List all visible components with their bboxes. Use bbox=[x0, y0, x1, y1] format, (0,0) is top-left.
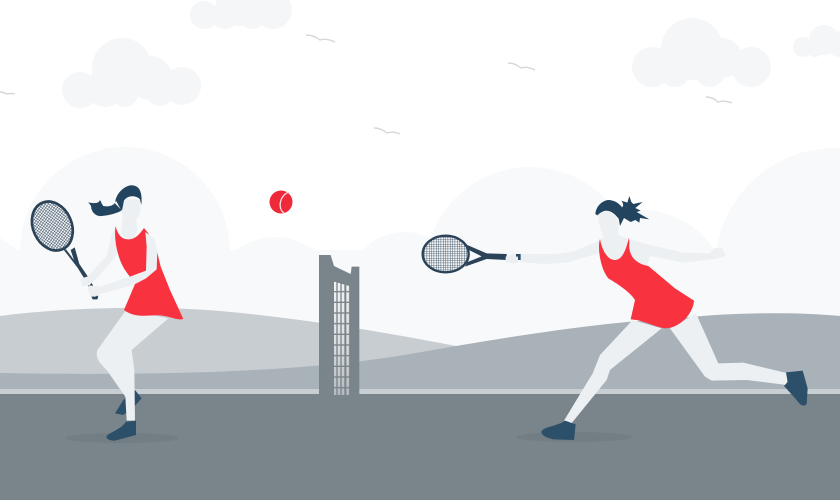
player shadows bbox=[65, 432, 632, 443]
right player dress bbox=[599, 238, 694, 328]
cloud top bbox=[190, 0, 292, 29]
left player dress bbox=[115, 226, 183, 319]
left player back shoe bbox=[115, 390, 142, 415]
cloud far right bbox=[793, 25, 840, 57]
player right bbox=[520, 227, 808, 440]
left player face bbox=[122, 198, 141, 225]
player left bbox=[24, 185, 183, 441]
right player front shoe bbox=[541, 421, 576, 440]
right player legs bbox=[564, 313, 788, 424]
tennis ball bbox=[270, 190, 292, 214]
right player back shoe bbox=[784, 371, 808, 406]
birds bbox=[0, 35, 732, 134]
cloud right bbox=[632, 18, 771, 87]
right player racket bbox=[423, 236, 521, 272]
left player legs bbox=[97, 312, 168, 421]
left player front shoe bbox=[106, 421, 136, 441]
court ground bbox=[0, 394, 840, 500]
background rounded hills bbox=[0, 147, 840, 390]
right player head bbox=[595, 196, 649, 234]
front hill bbox=[0, 313, 840, 390]
left player racket butt cap bbox=[91, 297, 98, 299]
right player body and arms bbox=[520, 227, 726, 267]
cloud left bbox=[62, 38, 201, 108]
left player back arm and neck bbox=[80, 217, 137, 286]
court line bbox=[0, 389, 840, 395]
back hill bbox=[0, 308, 456, 375]
left player hair bbox=[88, 185, 142, 216]
right player hair bbox=[595, 196, 649, 226]
tennis net bbox=[319, 255, 359, 395]
left player front arm bbox=[87, 232, 157, 299]
right player face bbox=[598, 211, 618, 234]
left player racket bbox=[24, 195, 98, 298]
